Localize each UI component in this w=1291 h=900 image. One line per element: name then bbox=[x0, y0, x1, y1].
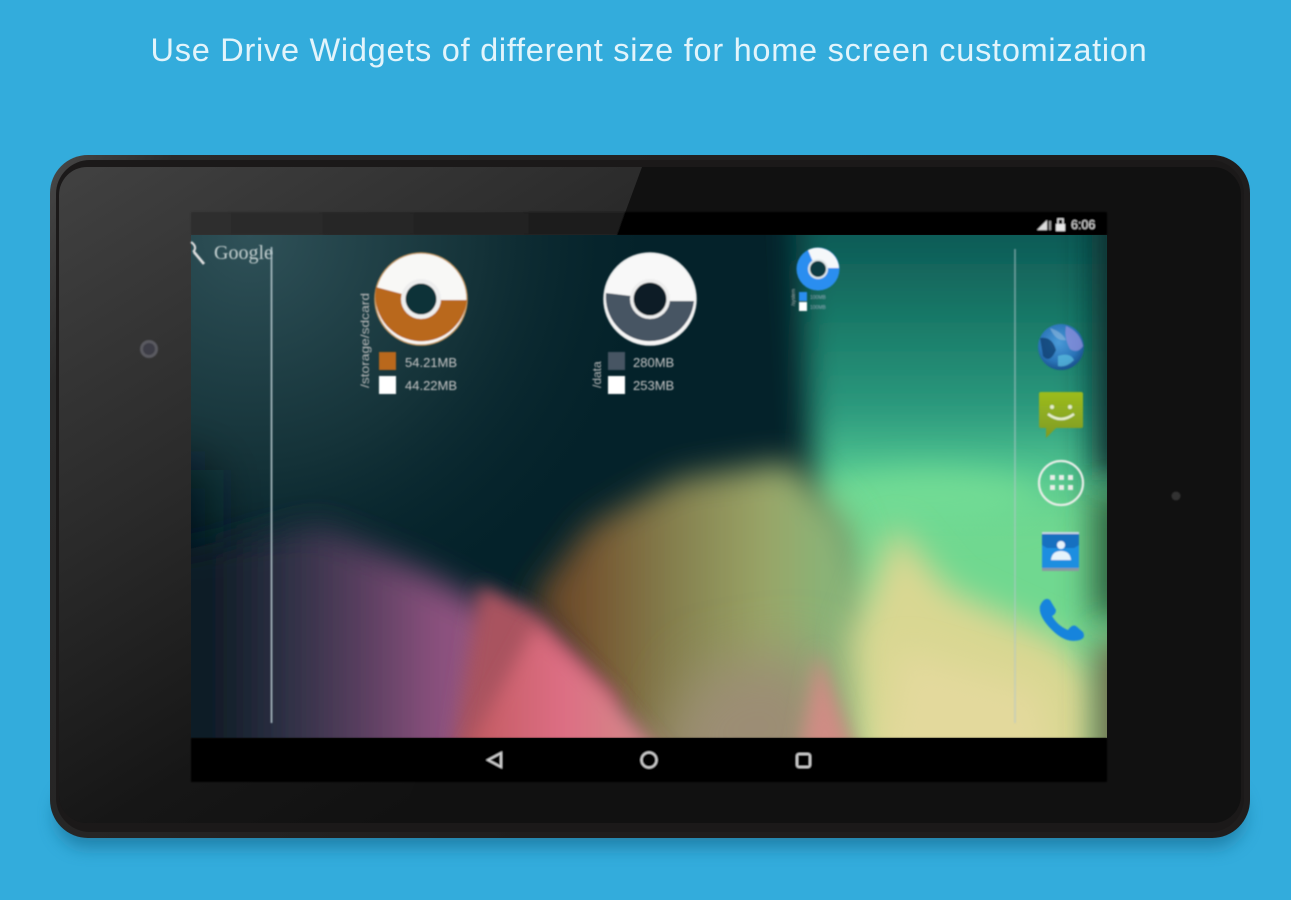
large donut widget: /storage/sdcard: 44.22MB bbox=[405, 378, 457, 393]
navigation bar bbox=[191, 738, 1107, 782]
large donut widget: /storage/sdcard bbox=[358, 253, 467, 394]
large donut widget: /data bbox=[590, 253, 696, 394]
icon: messaging bbox=[1039, 392, 1083, 438]
small donut widget: /system bbox=[791, 289, 797, 306]
icon: app drawer bbox=[1039, 461, 1083, 505]
status bar: 6:06 bbox=[1071, 218, 1095, 232]
tablet shadow bbox=[56, 785, 1244, 847]
title: Use Drive Widgets of different size for home screen customization bbox=[151, 32, 1147, 68]
sensor dot bbox=[1172, 492, 1180, 500]
panel guide lines bbox=[272, 247, 1015, 723]
front camera bbox=[140, 340, 158, 358]
search widget: Google bbox=[214, 242, 273, 264]
tablet illustration bbox=[48, 155, 1252, 856]
large donut widget: /storage/sdcard: 54.21MB bbox=[405, 355, 457, 370]
status bar bbox=[191, 212, 1107, 235]
small donut widget bbox=[791, 248, 840, 311]
tablet body bbox=[50, 155, 1250, 838]
large donut widget: /data: /data bbox=[590, 361, 604, 388]
icon: phone bbox=[1040, 599, 1084, 641]
small donut widget: 100MB bbox=[810, 305, 827, 311]
wallpaper bbox=[191, 235, 1107, 738]
icon: browser globe bbox=[1038, 324, 1084, 370]
large donut widget: /data: 280MB bbox=[633, 355, 674, 370]
small donut widget: 100MB bbox=[810, 295, 827, 301]
large donut widget: /storage/sdcard: /storage/sdcard bbox=[358, 293, 372, 388]
icon: contacts bbox=[1042, 532, 1079, 571]
large donut widget: /data: 253MB bbox=[633, 378, 674, 393]
